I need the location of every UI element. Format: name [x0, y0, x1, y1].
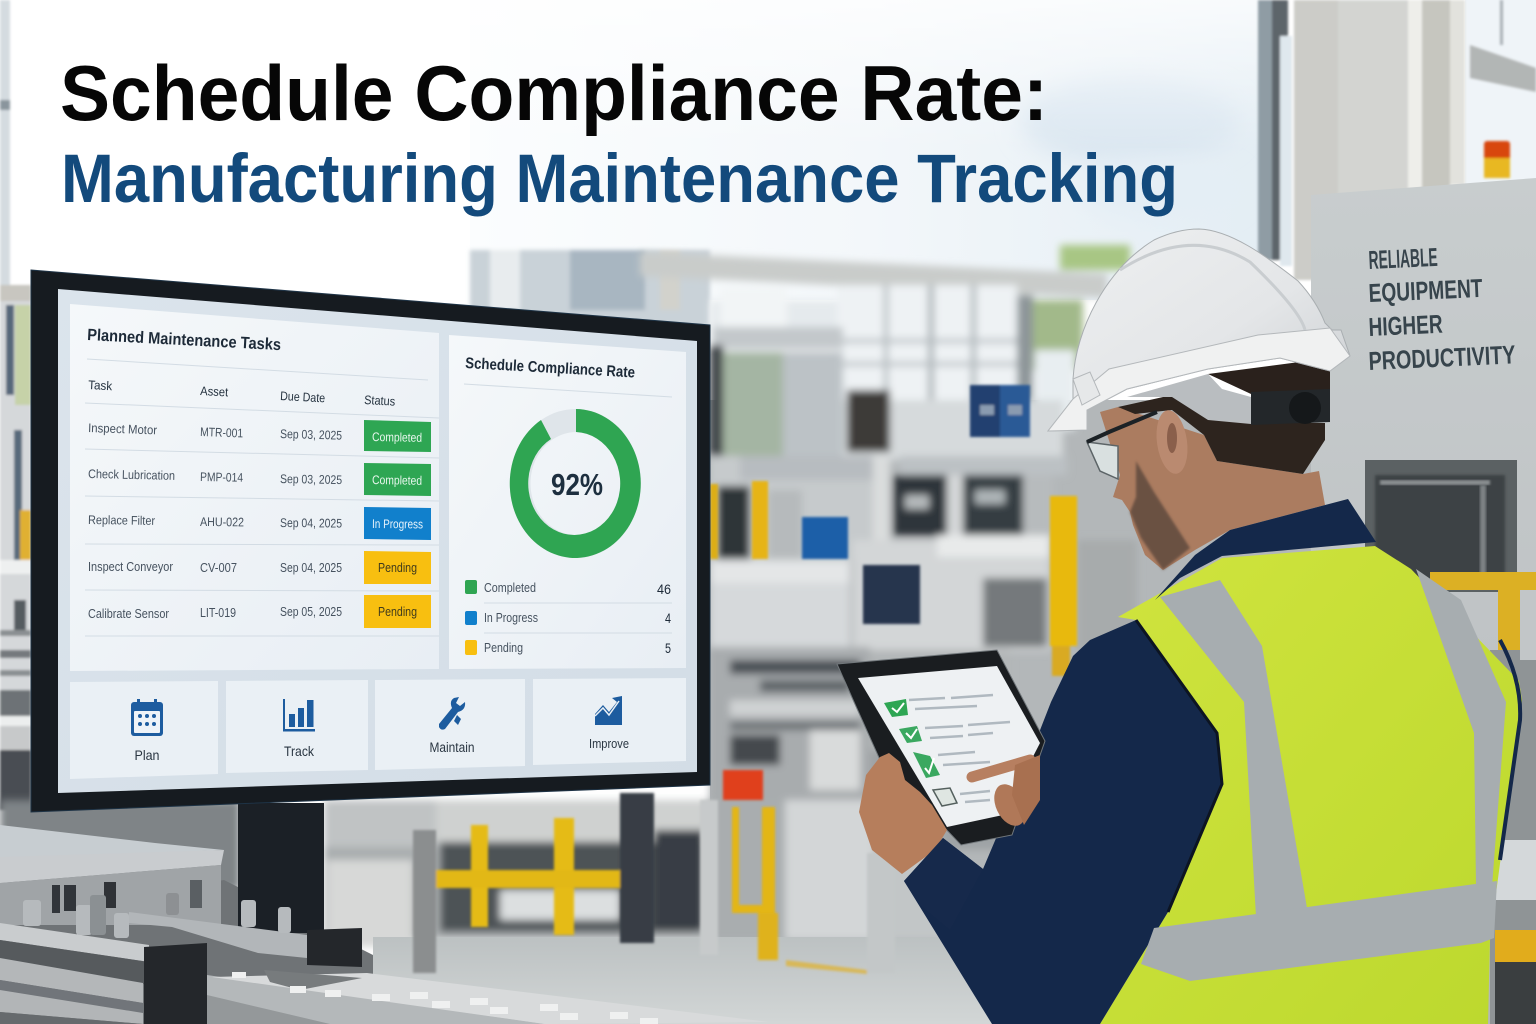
head strap [1251, 389, 1330, 425]
table rows: Sep 05, 2025 [280, 605, 342, 619]
shop floor [373, 937, 1013, 1024]
title line two: Manufacturing Maintenance Tracking [61, 140, 1178, 217]
status badges: Pending [378, 605, 417, 619]
status badges: Completed [372, 430, 422, 445]
conveyor rails [0, 912, 307, 1024]
status badges: Pending [378, 561, 417, 575]
title line one: Schedule Compliance Rate: [60, 49, 1048, 137]
table header [88, 378, 396, 409]
safety glasses [1087, 412, 1157, 479]
right structure columns [1258, 0, 1536, 280]
upper hair [1208, 358, 1330, 394]
helmet brim [1048, 328, 1350, 431]
hair [1118, 395, 1325, 474]
strap knob [1289, 392, 1321, 424]
helmet dome [1048, 229, 1350, 431]
table rows: Inspect Motor [88, 421, 157, 437]
sign slogan: HIGHER [1368, 309, 1443, 342]
tile label: Improve [589, 736, 629, 751]
table rows: AHU-022 [200, 515, 244, 529]
monitor screen [58, 289, 697, 793]
status badges: Completed [372, 473, 422, 488]
dashboard monitor [31, 270, 710, 812]
roller conveyor [207, 970, 769, 1024]
warning beacon [1484, 141, 1510, 178]
sign slogan [1368, 242, 1516, 376]
beard [1130, 461, 1190, 570]
reflective strips [1141, 569, 1506, 981]
black brackets [144, 928, 362, 1024]
icon: rising chart [595, 696, 622, 725]
tablet screen [858, 666, 1040, 827]
sleeve [904, 620, 1222, 1024]
panel: planned maintenance tasks [70, 304, 439, 671]
monitor stand [238, 803, 324, 933]
status badges [364, 420, 431, 628]
navy collar [1155, 499, 1376, 600]
icon: bar chart [283, 699, 315, 732]
steel bolts [23, 893, 291, 938]
legend [465, 580, 672, 656]
table rows: MTR-001 [200, 425, 243, 441]
compliance heading: Schedule Compliance Rate [465, 355, 636, 382]
table rows: Calibrate Sensor [88, 607, 169, 621]
mid-ground base [710, 400, 1536, 1024]
sky [470, 0, 1536, 300]
tile label: Track [284, 743, 315, 759]
yellow guards and posts [413, 481, 1077, 974]
table rows: LIT-019 [200, 606, 236, 620]
worker [837, 229, 1522, 1024]
table header: Status [364, 393, 396, 409]
table rows: CV-007 [200, 561, 237, 575]
icon: calendar [131, 699, 163, 736]
tablet checklist [884, 695, 1010, 806]
blue cabinets [802, 385, 1030, 624]
tablet [837, 650, 1045, 845]
tile: plan [70, 681, 218, 779]
tile: improve [533, 678, 686, 765]
monitor bezel [31, 270, 710, 812]
tile label: Plan [134, 747, 160, 763]
legend: Pending [484, 641, 523, 655]
sleeve behind vest, right edge [1500, 640, 1520, 860]
legend: Completed [484, 581, 536, 595]
title [60, 49, 1178, 217]
right hand [972, 755, 1040, 831]
table header: Asset [200, 384, 229, 399]
table rows: Sep 04, 2025 [280, 561, 342, 575]
sleeve cuff [904, 838, 983, 930]
helmet ridge [1120, 245, 1305, 330]
hard hat [1048, 229, 1350, 431]
tile label: Maintain [430, 740, 474, 755]
left hand [859, 753, 947, 874]
table rows [88, 421, 342, 621]
tile: maintain [375, 679, 525, 770]
conveyor machinery backing [0, 880, 373, 1024]
table header: Task [88, 378, 113, 393]
sign slogan: EQUIPMENT [1368, 273, 1483, 308]
left edge strip [0, 0, 31, 810]
table rows: Sep 03, 2025 [280, 472, 342, 487]
conveyor foreground [0, 803, 769, 1024]
vest body [1100, 546, 1522, 1024]
wall sign [1311, 178, 1536, 1024]
table rows: Replace Filter [88, 513, 155, 528]
table rows: Check Lubrication [88, 467, 175, 483]
legend: 4 [665, 610, 671, 626]
ear [1153, 408, 1191, 476]
legend: 5 [665, 640, 671, 656]
neck and face [1100, 407, 1325, 570]
helmet clip [1073, 372, 1100, 405]
table rows: Sep 03, 2025 [280, 427, 342, 443]
table rows: Sep 04, 2025 [280, 516, 342, 531]
panel heading: Planned Maintenance Tasks [87, 326, 281, 354]
status badges: In Progress [372, 517, 423, 531]
sign slogan: RELIABLE [1368, 242, 1438, 275]
tile: track [226, 680, 368, 773]
legend: 46 [657, 581, 671, 597]
donut chart [510, 409, 641, 558]
donut chart: 92% [551, 467, 603, 502]
table rows: PMP-014 [200, 470, 243, 485]
icon: wrench [439, 697, 465, 730]
panel: schedule compliance rate [449, 335, 686, 669]
legend: In Progress [484, 611, 538, 625]
vest edge [1136, 620, 1222, 912]
table header: Due Date [280, 389, 326, 405]
table rows: Inspect Conveyor [88, 560, 173, 574]
suspension band [1127, 374, 1251, 424]
upper conveyor frame [0, 825, 224, 925]
